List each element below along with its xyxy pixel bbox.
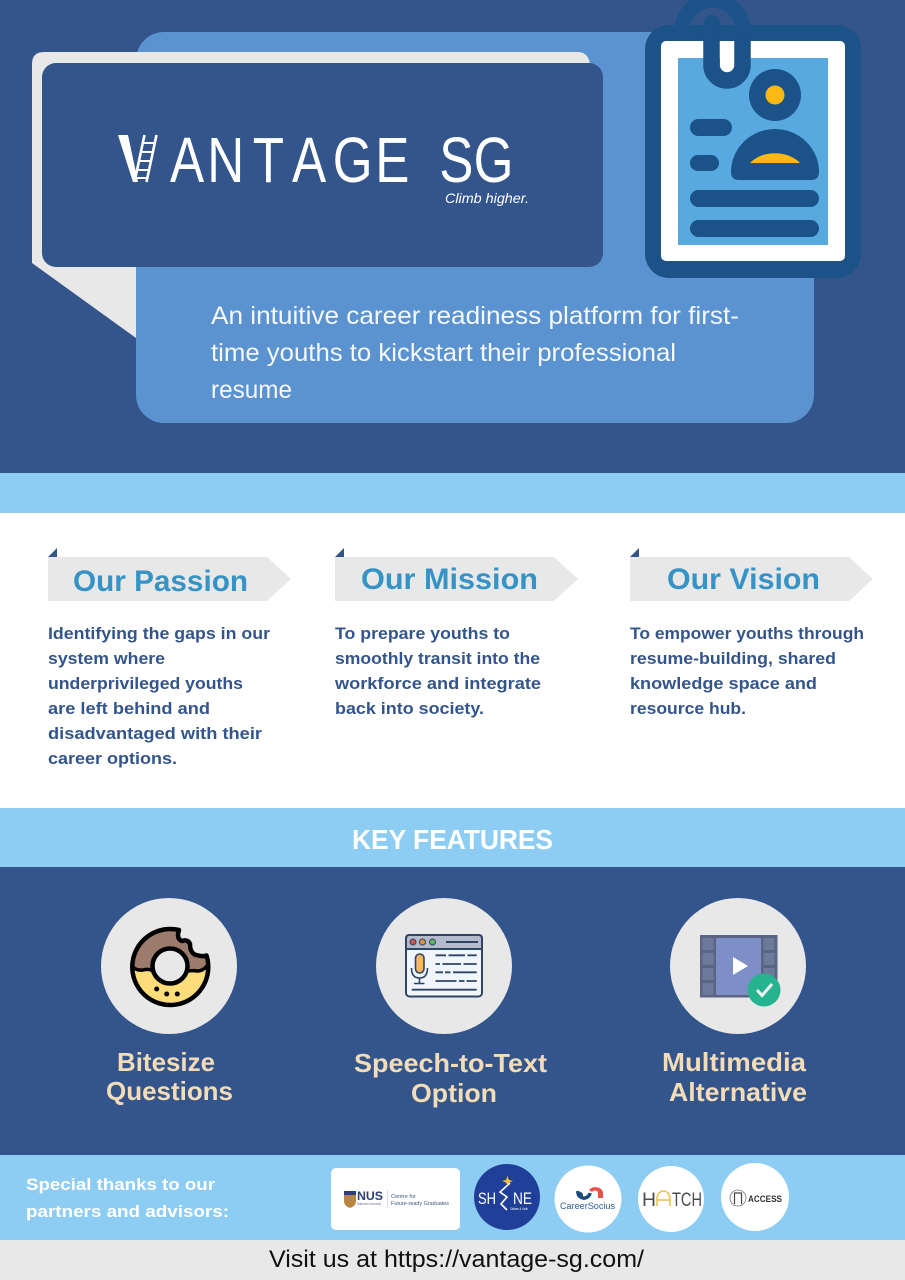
footer: website link: Visit us at https://vantage-sg.com/ [269, 1246, 644, 1273]
feature: multimedia alternative [662, 898, 807, 1107]
logo: NUS: NUS [357, 1191, 383, 1203]
column: Our Vision: knowledge space and [630, 674, 817, 693]
label: Multimedia Alternative: Alternative [669, 1077, 807, 1107]
column: Our Vision: resume-building, shared [630, 649, 836, 668]
partners heading [26, 1175, 229, 1221]
logo: NUS: Centre for [391, 1194, 416, 1200]
column: Our Mission: smoothly transit into the [335, 649, 540, 668]
column: Our Passion: Our Passion [73, 565, 248, 598]
logo: HATCH: TCH [672, 1190, 702, 1211]
label: Bitesize Questions [106, 1047, 233, 1106]
logo: HATCH [638, 1166, 704, 1232]
label: Speech-to-Text Option: Speech-to-Text [354, 1048, 547, 1078]
column: Our Passion: system where [48, 649, 165, 668]
panel: key features [101, 898, 807, 1108]
column: Our Vision [630, 548, 873, 718]
partners heading: partners and advisors: [26, 1202, 229, 1221]
column: Our Mission: back into society. [335, 699, 484, 718]
logo: CareerSocius: CareerSocius [560, 1201, 615, 1212]
logo slogan: Climb higher. [445, 190, 529, 206]
heading: key features: KEY FEATURES [352, 824, 553, 855]
icon: bitten donut [132, 929, 208, 1005]
icon: ID card with paper clip [645, 0, 861, 278]
column: Our Passion: underprivileged youths [48, 674, 243, 693]
panel: partners [0, 1155, 905, 1240]
logo mark: V with ladder [118, 135, 156, 182]
column: Our Passion: career options. [48, 749, 177, 768]
logo: NUS: National University [357, 1202, 381, 1206]
label: Multimedia Alternative [662, 1047, 807, 1107]
logo: SHINE: Children & Youth [510, 1207, 528, 1211]
column: Our Vision: Our Vision [667, 563, 820, 596]
label: Speech-to-Text Option: Option [411, 1078, 497, 1108]
feature: speech to text [354, 898, 547, 1108]
light blue divider band [0, 473, 905, 513]
panel: hero header [32, 0, 861, 423]
tagline text: time youths to kickstart their professional [211, 339, 676, 367]
column: Our Passion [48, 548, 291, 768]
logo: Vantage SG [118, 126, 529, 206]
column: Our Vision: To empower youths through [630, 624, 864, 643]
tagline text [211, 302, 739, 404]
column: Our Passion: are left behind and [48, 699, 210, 718]
partners heading: Special thanks to our [26, 1175, 215, 1194]
column: Our Passion: disadvantaged with their [48, 724, 262, 743]
logo: SHINE: SH [478, 1189, 496, 1208]
folded ribbon behind logo [32, 52, 590, 338]
label: Speech-to-Text Option [354, 1048, 547, 1108]
logo: NUS: Future-ready Graduates [391, 1201, 449, 1207]
icon: film strip with check [700, 935, 780, 1006]
tagline text: resume [211, 376, 292, 404]
feature: bitesize questions [101, 898, 237, 1106]
logo: HATCH: H [642, 1190, 656, 1211]
icon: browser window with microphone [406, 935, 482, 996]
heading: key features [0, 808, 905, 867]
footer: website link [0, 1240, 905, 1280]
label: Bitesize Questions: Bitesize [117, 1047, 215, 1077]
logo: ACCESS: ACCESS [748, 1194, 782, 1205]
label: Multimedia Alternative: Multimedia [662, 1047, 807, 1077]
logo: SHINE [474, 1164, 540, 1230]
label: Bitesize Questions: Questions [106, 1076, 233, 1106]
column: Our Passion: Identifying the gaps in our [48, 624, 270, 643]
logo: SHINE: NE [513, 1189, 532, 1208]
column: Our Mission: To prepare youths to [335, 624, 510, 643]
column: Our Mission [334, 548, 578, 718]
column: Our Vision: resource hub. [630, 699, 746, 718]
logo wordmark: ANTAGE SG [170, 126, 513, 196]
panel: passion, mission, vision [0, 513, 905, 808]
panel: logo box [42, 63, 603, 267]
logo: CareerSocius [554, 1166, 622, 1232]
column: Our Mission: workforce and integrate [334, 674, 541, 693]
panel: tagline background [136, 32, 814, 423]
column: Our Mission: Our Mission [361, 563, 538, 596]
tagline text: An intuitive career readiness platform for first- [211, 302, 739, 330]
logo: NUS [331, 1168, 460, 1230]
logo: ACCESS [721, 1163, 789, 1231]
